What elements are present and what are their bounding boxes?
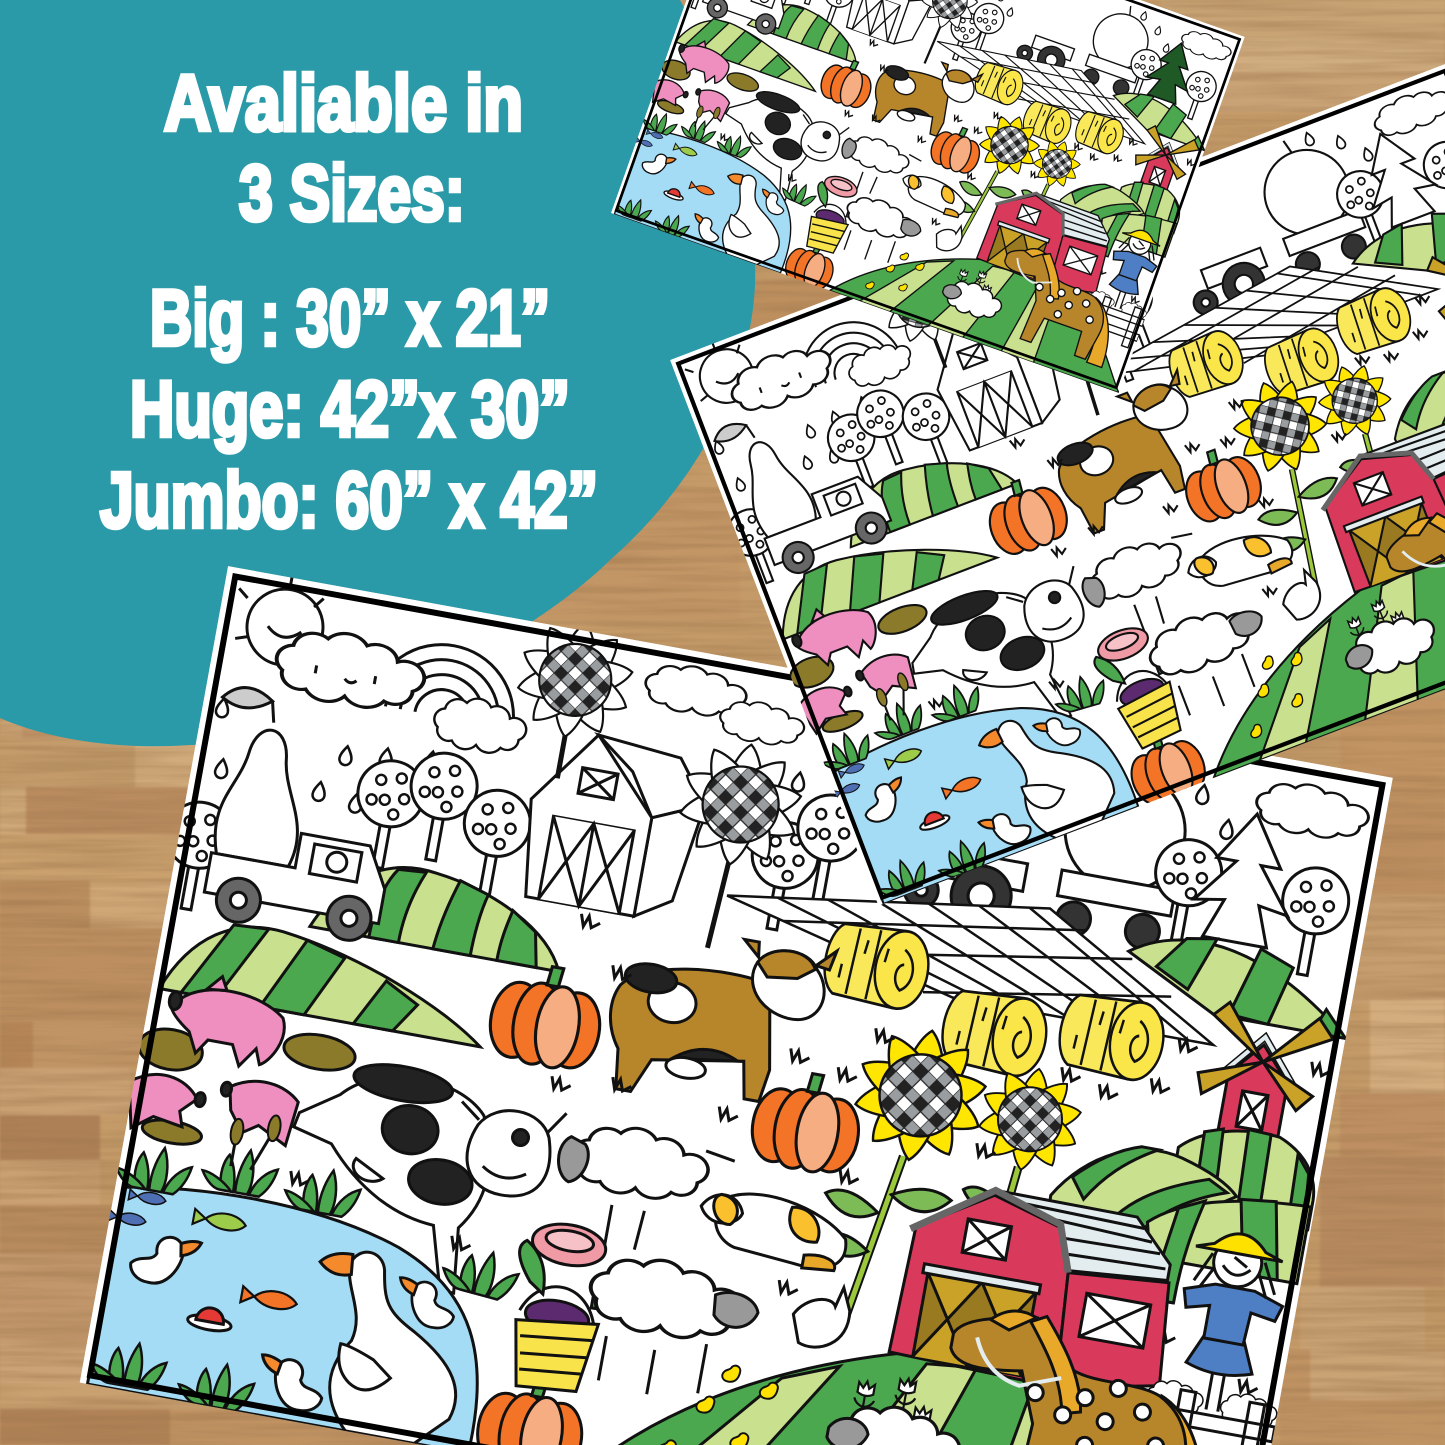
fluffy sheep centre (573, 1249, 764, 1411)
teal circle panel (0, 0, 755, 746)
striped hill right (1120, 924, 1359, 1038)
pink bowl (529, 1219, 609, 1271)
tractor, wagon and apple (900, 715, 1198, 959)
pumpkins (412, 957, 878, 1445)
heading and size list (100, 58, 598, 544)
black spotted cow (270, 1049, 570, 1307)
small poster (604, 0, 1246, 397)
horse (924, 1300, 1234, 1445)
size: huge: Huge: 42”x 30” (130, 364, 570, 453)
grass marks (282, 871, 1334, 1397)
pond animals (81, 1186, 466, 1435)
windmill (1187, 999, 1336, 1154)
pine tree and right trees (1142, 798, 1362, 981)
striped hills lower right (1036, 1097, 1323, 1324)
goose (291, 1244, 479, 1445)
uncoloured sunflowers (474, 613, 829, 960)
foreground green hill (581, 1302, 1276, 1445)
clouds (267, 593, 1374, 910)
orchard trees (154, 679, 869, 1026)
basket of beets (496, 1239, 640, 1404)
fence (1133, 1376, 1280, 1445)
size: big: Big : 30” x 21” (150, 273, 550, 362)
yellow sunflowers (802, 1017, 1094, 1364)
size: jumbo: Jumbo: 60” x 42” (100, 455, 598, 544)
pink pig (160, 968, 292, 1073)
dog (694, 1184, 852, 1275)
hay bales (811, 918, 1174, 1101)
reeds (78, 1089, 540, 1445)
rainbow (371, 633, 525, 729)
heading line 2: 3 Sizes: (239, 148, 465, 237)
raindrops (202, 589, 1244, 968)
chicks and tulips (657, 1337, 938, 1445)
sun (227, 564, 332, 671)
truck (200, 818, 392, 947)
chicken (788, 1280, 854, 1353)
poster frame (90, 576, 1382, 1445)
mud patches (123, 1003, 358, 1173)
scarecrow (1164, 1226, 1294, 1420)
pear on truck (195, 683, 322, 867)
piglets (121, 1058, 301, 1156)
heading line 1: Avaliable in (164, 58, 523, 147)
pond (87, 1176, 507, 1445)
striped hill top centre (310, 851, 572, 972)
medium poster (660, 58, 1445, 915)
brown cow (597, 913, 837, 1123)
white barn (514, 725, 714, 925)
red barn (887, 1177, 1189, 1405)
large poster (65, 556, 1394, 1445)
striped hill left (159, 911, 494, 1047)
fenced field (716, 851, 1232, 1045)
sheep foreground (822, 1396, 965, 1445)
sheep front left (544, 1115, 737, 1269)
